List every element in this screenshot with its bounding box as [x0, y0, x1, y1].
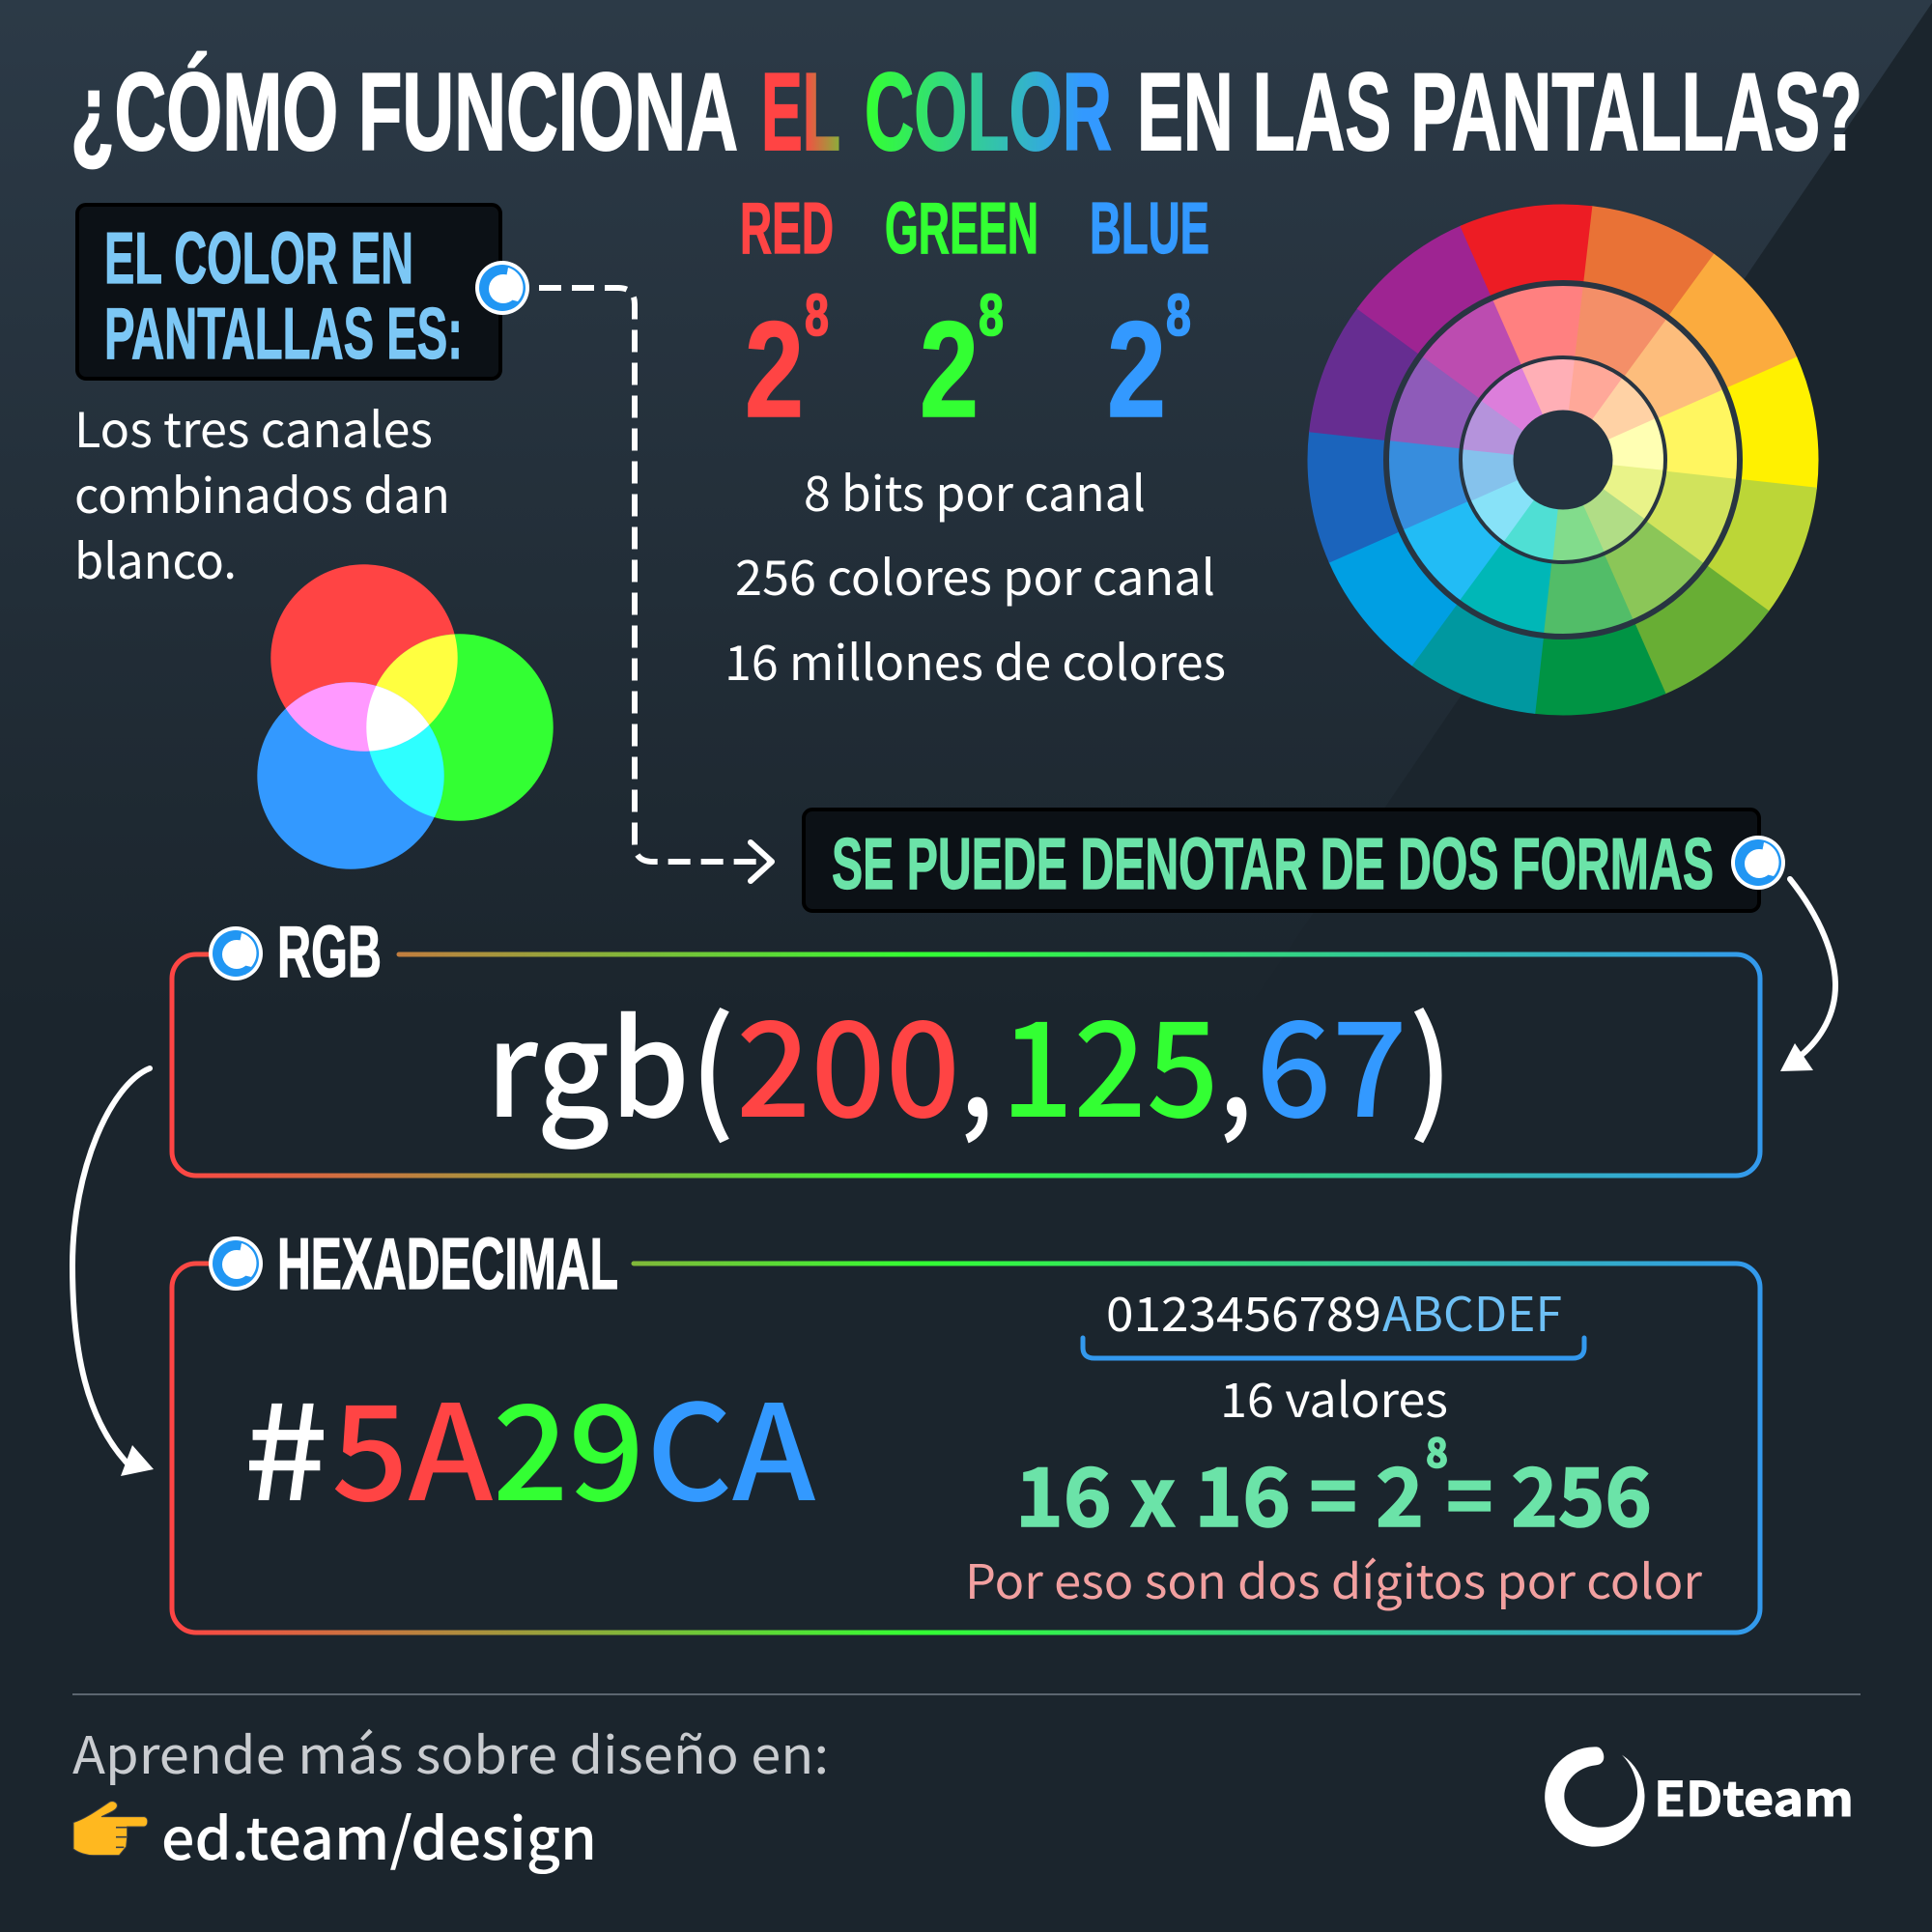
channel labels: BLUE [1090, 187, 1209, 269]
channel labels [740, 187, 1209, 269]
channel labels: GREEN [885, 187, 1038, 269]
text: tres canales: Los tres canales [74, 392, 433, 462]
text: bits and colors: 256 colores por canal [735, 540, 1215, 610]
arrow: right curved [1780, 879, 1835, 1071]
hex value [243, 1348, 816, 1539]
formula [1015, 1421, 1652, 1550]
text: tres canales: blanco. [74, 524, 237, 593]
rgb value: 200 [736, 964, 960, 1155]
text: bits and colors [724, 456, 1226, 695]
title: ¿CÓMO FUNCIONA [71, 51, 738, 174]
text: tres canales [74, 392, 450, 593]
rgb value: 125 [1001, 964, 1219, 1155]
icon: dot connector 2 [1731, 836, 1785, 890]
panel: se puede denotar de dos formas [804, 810, 1759, 911]
title [71, 51, 1862, 174]
formula: 8 [1426, 1421, 1448, 1480]
icon: dot connector 1 [475, 261, 529, 315]
color wheel [1262, 158, 1864, 761]
title: EL [761, 51, 840, 174]
hex value: 29 [493, 1348, 644, 1539]
rgb value: 67 [1256, 964, 1407, 1155]
panel: hexadecimal [172, 1223, 1760, 1633]
panel: el color en pantallas es: EL COLOR EN [104, 217, 413, 298]
powers of two: 8 [805, 282, 829, 348]
footer text: Aprende más sobre diseño en: [72, 1716, 829, 1789]
rgb value [486, 964, 1453, 1155]
text: 16 valores: 16 valores [1220, 1363, 1448, 1432]
rgb value: ) [1408, 964, 1453, 1155]
icon: pointing hand [73, 1802, 148, 1856]
arrow: dashed connector [539, 288, 772, 881]
footer divider [72, 1693, 1861, 1695]
EDteam logo: EDteam [1654, 1762, 1854, 1831]
rgb value: , [959, 964, 994, 1155]
hex value: # [243, 1348, 328, 1539]
digits: 0123456789 [1106, 1277, 1381, 1346]
heading: hexadecimal: HEXADECIMAL [277, 1223, 618, 1304]
rgb value: rgb( [486, 964, 735, 1155]
powers of two: 2 [745, 293, 804, 445]
rgb value: , [1218, 964, 1253, 1155]
formula: = 256 [1446, 1434, 1652, 1550]
text: tres canales: combinados dan [74, 458, 450, 527]
powers of two: 2 [920, 293, 979, 445]
EDteam logo [1545, 1747, 1854, 1847]
heading: RGB: RGB [277, 911, 382, 992]
panel: el color en pantallas es: PANTALLAS ES: [104, 293, 463, 374]
title: COLOR [865, 51, 1112, 174]
icon: RGB dot [209, 926, 263, 980]
hex value: 5A [331, 1348, 494, 1539]
powers of two [745, 282, 1191, 445]
bracket [1083, 1338, 1584, 1358]
text: por eso: Por eso son dos dígitos por color [965, 1545, 1703, 1613]
channel labels: RED [740, 187, 834, 269]
panel: el color en pantallas es [77, 205, 500, 379]
powers of two: 8 [1166, 282, 1191, 348]
text: bits and colors: 16 millones de colores [724, 625, 1226, 695]
formula: 16 x 16 = 2 [1015, 1434, 1424, 1550]
arrow: left curved [72, 1068, 154, 1476]
text: bits and colors: 8 bits por canal [804, 456, 1146, 526]
link: ed.team/design [161, 1793, 597, 1877]
digits: ABCDEF [1382, 1277, 1562, 1346]
powers of two: 8 [979, 282, 1004, 348]
digits [1106, 1277, 1562, 1346]
panel: RGB [172, 911, 1760, 1176]
icon: hexadecimal dot [209, 1236, 263, 1291]
RGB venn diagram [257, 564, 554, 869]
hex value: CA [646, 1348, 816, 1539]
powers of two: 2 [1107, 293, 1166, 445]
